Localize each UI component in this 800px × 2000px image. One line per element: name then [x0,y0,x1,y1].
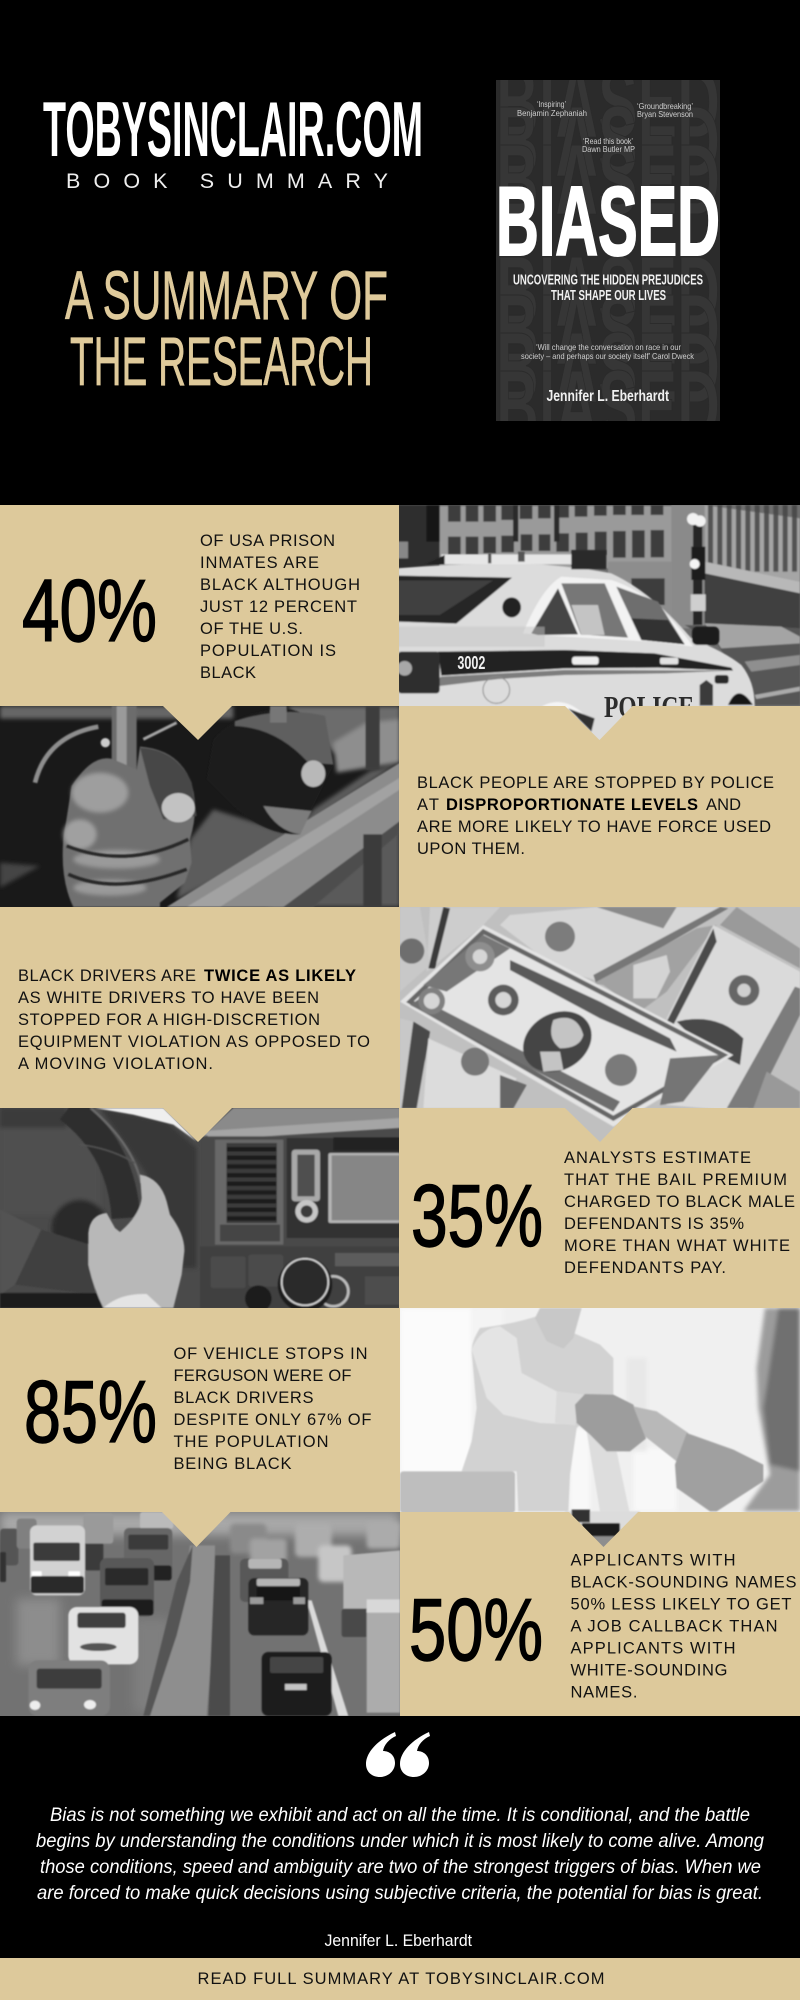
text: prison statistic [200,532,360,682]
text: prison statistic: BLACK [200,664,256,682]
quote text: those conditions, speed and ambiguity are two of the strongest triggers of bias. When we [40,1857,761,1878]
text: equipment violations: STOPPED FOR A HIGH-DISCRETION [18,1011,320,1029]
pointer: down to hands photo [163,706,232,740]
cover background lettering [500,80,717,421]
stat: 35%: 35% [411,1166,543,1265]
text: police stops: BLACK PEOPLE ARE STOPPED BY POLICE [417,774,774,792]
photo: driver at steering wheel [0,1108,399,1308]
text: bail premium: ANALYSTS ESTIMATE [564,1149,751,1167]
panel: 40% prison inmates [0,505,399,740]
distant cars, left [0,1529,18,1565]
dark hatchback [100,1558,154,1616]
text: prison statistic: OF USA PRISON [200,532,335,550]
pointer: down to driver photo [163,1108,232,1142]
text: ferguson statistic: THE POPULATION [174,1433,328,1451]
text: bail premium [564,1149,795,1277]
quote attribution: Jennifer L. Eberhardt [324,1931,472,1950]
text: equipment violations: EQUIPMENT VIOLATION AS OPPOSED TO [18,1033,370,1051]
cover endorsements: Bryan Stevenson [637,109,693,119]
text: equipment violations [18,967,370,1073]
left hand [63,747,195,907]
text: job callbacks: BLACK-SOUNDING NAMES [570,1574,796,1592]
stat: 50%: 50% [409,1580,543,1679]
text: prison statistic: INMATES ARE [200,554,319,572]
photo: handshake [400,1308,800,1547]
panel: 50% job callbacks [400,1512,800,1716]
cover endorsements [517,99,695,361]
white van [30,1525,85,1595]
text: job callbacks: WHITE-SOUNDING [570,1662,728,1680]
truck [343,1550,400,1622]
text: police stops [417,774,774,858]
heading: a summary of the research: THE RESEARCH [70,323,373,400]
cover endorsements: ‘Inspiring’ [537,99,566,109]
text: equipment violations: TWICE AS LIKELY [204,967,356,985]
right hand [207,709,333,834]
text: prison statistic: POPULATION IS [200,642,336,660]
text: equipment violations: A MOVING VIOLATION. [18,1055,213,1073]
text: ferguson statistic: BEING BLACK [174,1455,292,1473]
text: prison statistic: JUST 12 PERCENT [200,598,357,616]
cover endorsements: Benjamin Zephaniah [517,108,587,118]
subtitle: book summary: BOOK SUMMARY [66,169,388,193]
text: ferguson statistic: FERGUSON WERE OF [174,1367,352,1385]
photo: traffic jam [0,1512,400,1716]
text: job callbacks: 50% LESS LIKELY TO GET [570,1596,792,1614]
text: police stops: AT [417,796,439,814]
cover endorsements: ‘Groundbreaking’ [637,101,693,111]
cover endorsements: ‘Read this book’ [583,136,633,146]
white car [68,1607,138,1664]
heading: a summary of the research: A SUMMARY OF [65,257,388,334]
quote text: are forced to make quick decisions using subjective criteria, the potential for bias is great. [37,1883,763,1904]
text: ferguson statistic: OF VEHICLE STOPS IN [174,1345,368,1363]
text: ferguson statistic: DESPITE ONLY 67% OF [174,1411,372,1429]
panel: 35% bail premium [399,1108,800,1308]
text: ferguson statistic: BLACK DRIVERS [174,1389,314,1407]
text: prison statistic: BLACK ALTHOUGH [200,576,360,594]
cover subtitle: THAT SHAPE OUR LIVES [551,288,666,304]
text: bail premium: MORE THAN WHAT WHITE [564,1237,790,1255]
quote section [36,1732,764,1950]
text: job callbacks: APPLICANTS WITH [570,1552,736,1570]
text: job callbacks [570,1552,796,1702]
stat: 40%: 40% [22,561,157,660]
cover endorsements: ‘Will change the conversation on race in our [536,342,681,352]
text: job callbacks: A JOB CALLBACK THAN [570,1618,778,1636]
steering wheel [68,1108,126,1218]
text: bail premium: DEFENDANTS IS 35% [564,1215,744,1233]
police markings: 3002 [457,653,485,673]
book cover [496,80,720,421]
photo: hands gripping bars [0,706,399,907]
text: equipment violations: AS WHITE DRIVERS TO HAVE BEEN [18,989,319,1007]
panel: twice as likely [0,907,400,1142]
text: ferguson statistic [174,1345,372,1473]
photo: dollar bills [400,907,800,1142]
dark van [124,1528,172,1581]
text: job callbacks: NAMES. [570,1684,638,1702]
heading: a summary of the research [65,257,388,400]
footer bar [0,1958,800,2000]
quote text: Bias is not something we exhibit and act on all the time. It is conditional, and the battle [50,1805,750,1826]
text: bail premium: CHARGED TO BLACK MALE [564,1193,795,1211]
photo: police car [399,505,800,740]
cover subtitle: UNCOVERING THE HIDDEN PREJUDICES [513,272,703,288]
stat: 85%: 85% [24,1362,157,1461]
panel: stopped by police [399,706,800,907]
car body [398,564,755,745]
text: prison statistic: OF THE U.S. [200,620,303,638]
footer call to action: READ FULL SUMMARY AT TOBYSINCLAIR.COM [198,1970,604,1988]
grey car [28,1660,110,1716]
cover endorsements: society – and perhaps our society itself’ Carol Dweck [521,351,695,361]
main bill [400,925,733,1127]
text: bail premium: DEFENDANTS PAY. [564,1259,726,1277]
text: equipment violations: BLACK DRIVERS ARE [18,967,196,985]
quote text [36,1805,764,1904]
cover subtitle [513,272,703,304]
police markings [457,653,694,724]
cars right lane [240,1559,288,1602]
text: police stops: AND [706,796,741,814]
hand [88,1175,184,1308]
header [43,85,423,400]
panel: 85% ferguson stops [0,1308,400,1547]
text: police stops: ARE MORE LIKELY TO HAVE FORCE USED [417,818,771,836]
text: police stops: UPON THEM. [417,840,525,858]
text: bail premium: THAT THE BAIL PREMIUM [564,1171,787,1189]
icon: quotation marks [366,1732,430,1777]
cover endorsements: Dawn Butler MP [582,144,635,154]
cover author: Jennifer L. Eberhardt [546,388,670,405]
police markings: POLICE [604,690,694,724]
left arm [0,1210,41,1295]
text: police stops: DISPROPORTIONATE LEVELS [446,796,698,814]
quote text: begins by understanding the conditions under which it is most likely to come alive. Among [36,1831,764,1852]
text: job callbacks: APPLICANTS WITH [570,1640,736,1658]
pointer: down to traffic photo [162,1512,230,1547]
